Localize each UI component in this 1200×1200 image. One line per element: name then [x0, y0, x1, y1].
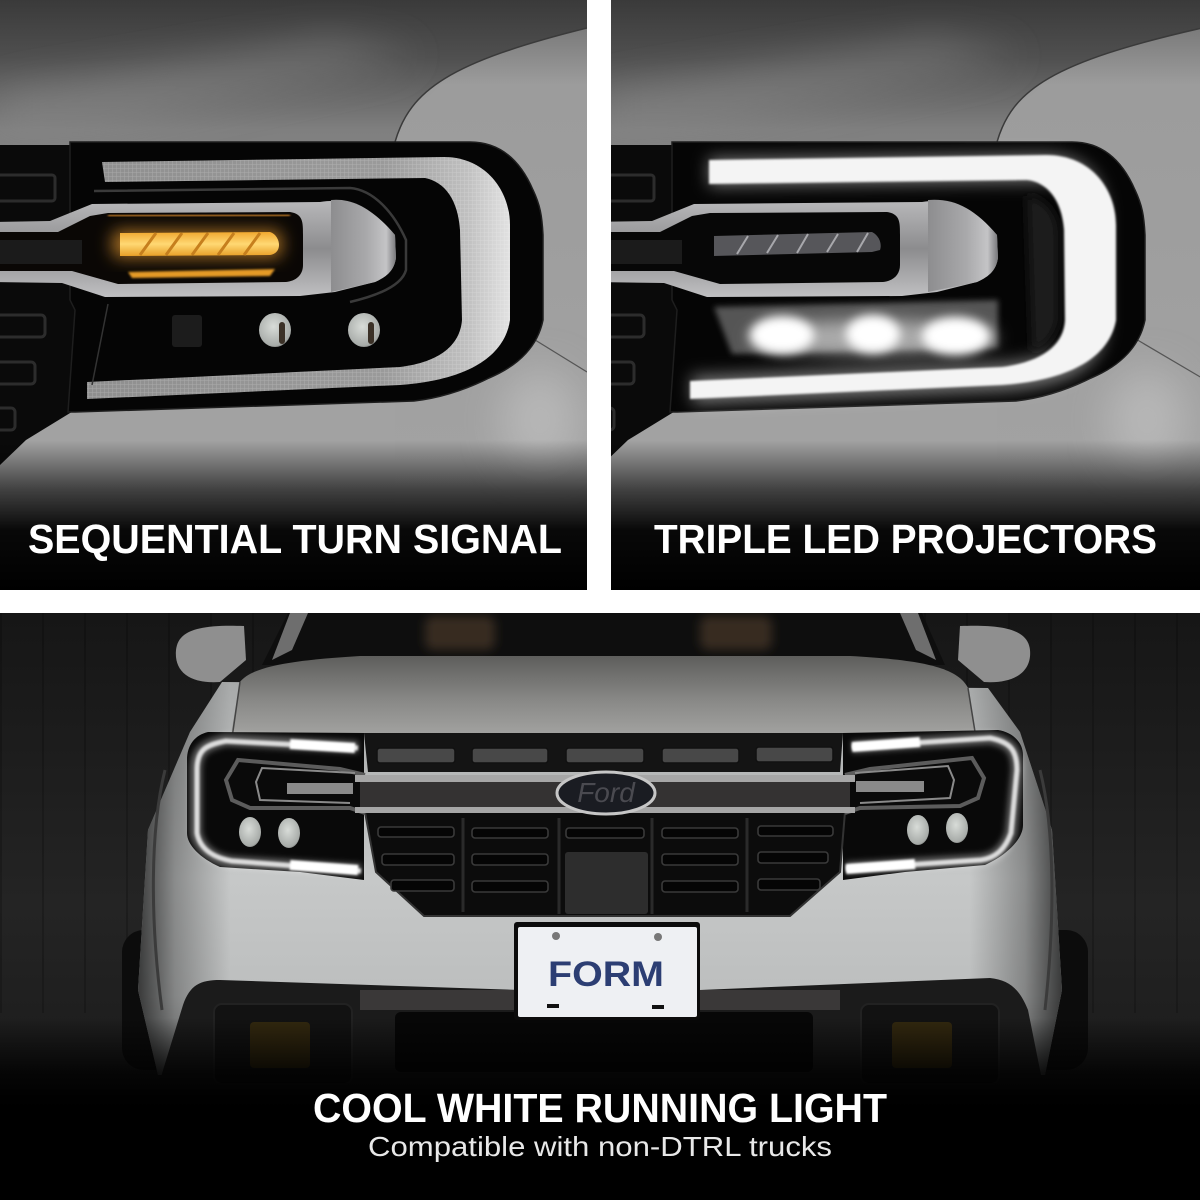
lens dark reflection right — [368, 322, 374, 344]
FORM logo on plate: FORM — [548, 955, 664, 994]
Ford oval badge — [557, 772, 655, 814]
left fog lamp — [250, 1022, 310, 1068]
right DRL glow — [846, 738, 1017, 868]
panel: sequential turn signal — [0, 0, 587, 600]
right wheel — [1020, 930, 1088, 1070]
hood streak highlight — [13, 26, 388, 116]
projector glow — [748, 320, 998, 356]
lit DRL tube — [690, 155, 1116, 399]
left DRL bright ends — [290, 744, 358, 870]
silver bezel — [592, 201, 998, 297]
right mirror — [958, 626, 1030, 682]
lower body area — [622, 402, 997, 447]
grille backing — [592, 145, 692, 465]
grey vehicle body background — [611, 0, 1200, 145]
sequential LED stripes — [140, 233, 260, 255]
right headlight housing — [843, 730, 1023, 880]
left projector lenses — [239, 817, 300, 848]
body side shading — [138, 682, 1062, 1075]
windshield pillar left — [272, 613, 308, 660]
left lamp inner ring — [256, 768, 355, 803]
central dark bar — [360, 782, 850, 807]
hood — [230, 656, 977, 740]
LED projector 1 — [750, 316, 814, 354]
hood crease right — [968, 688, 976, 738]
lower grille opening — [395, 1012, 813, 1072]
right LED bar — [856, 781, 924, 792]
panel: cool white running light, full truck front — [0, 613, 1200, 1200]
wall stripes — [0, 613, 1200, 1013]
dim projector — [172, 315, 202, 347]
projector signal opening — [592, 212, 900, 284]
left mirror — [176, 626, 246, 682]
unlit DRL band — [87, 157, 510, 399]
projector lens middle — [259, 313, 291, 347]
headlight housing — [670, 142, 1145, 412]
projector module backing — [714, 300, 998, 354]
plate screws — [552, 932, 662, 941]
headlight housing — [68, 142, 543, 412]
left DRL tube — [197, 741, 361, 871]
right fog lamp — [892, 1022, 952, 1068]
left lamp silver bezel — [226, 760, 365, 813]
hood crease line — [997, 28, 1200, 142]
projector inner line — [92, 304, 108, 385]
amber lower strip — [128, 269, 275, 278]
upper chrome bar — [355, 775, 855, 782]
projector lens right — [348, 313, 380, 347]
upper chrome trim line — [94, 188, 406, 302]
licence plate — [518, 927, 697, 1017]
black textured strip — [592, 240, 682, 264]
panel: triple LED projectors — [592, 0, 1200, 600]
lens dark reflection middle — [279, 322, 285, 344]
lower fender highlight — [500, 370, 580, 470]
grille slots — [0, 175, 55, 430]
soft reflector behind tube — [1027, 195, 1058, 352]
grille slots — [592, 175, 654, 430]
fade to black — [611, 440, 1200, 590]
right DRL tube — [846, 738, 1017, 869]
lower fender highlight — [1107, 370, 1187, 470]
grey vehicle body background — [0, 0, 587, 145]
silver bezel — [0, 201, 396, 297]
hood crease left — [232, 682, 240, 738]
upper grille pills — [377, 747, 833, 763]
subheading: compatibility: Compatible with non-DTRL trucks — [368, 1131, 832, 1162]
right fender flare line — [1040, 770, 1052, 1010]
amber signal bar — [120, 232, 279, 256]
silver block — [928, 200, 998, 292]
fade to black — [0, 1018, 1200, 1200]
front grille top section — [364, 733, 843, 772]
right fog surround — [861, 1004, 999, 1084]
left fender flare line — [153, 770, 165, 1010]
headlight assembly, lit — [611, 26, 1200, 475]
left LED bar — [287, 783, 353, 794]
right projector lenses — [907, 813, 968, 845]
silver block — [331, 200, 396, 292]
lower bumper — [160, 978, 1042, 1080]
black textured strip — [0, 240, 82, 264]
lower grille verticals — [463, 818, 747, 914]
amber glow — [112, 230, 282, 258]
label: sequential turn signal: SEQUENTIAL TURN SIGNAL — [28, 516, 562, 562]
right lamp inner ring — [855, 766, 954, 803]
left wheel — [122, 930, 192, 1070]
label: triple LED projectors: TRIPLE LED PROJECTORS — [654, 516, 1157, 562]
turn signal opening — [0, 212, 303, 284]
hood streak highlight — [615, 26, 990, 116]
LED projector 2 — [846, 315, 900, 353]
grille backing — [0, 145, 74, 465]
panel gap line — [536, 340, 587, 372]
centre sensor module — [565, 852, 648, 914]
lit DRL glow — [692, 168, 1092, 390]
fender panel — [998, 29, 1200, 395]
truck body — [138, 682, 1062, 1075]
unlit signal bar — [714, 232, 881, 256]
fender panel — [396, 28, 587, 395]
cab and windshield — [262, 613, 945, 665]
bumper centre band — [360, 990, 840, 1010]
licence plate frame — [514, 922, 700, 1020]
hood crease line — [395, 28, 587, 142]
badge script: Ford — [577, 777, 636, 808]
lower body area — [20, 402, 395, 447]
panel gap line — [1138, 340, 1200, 378]
fade to black — [0, 440, 587, 590]
left headlight housing — [187, 732, 364, 880]
signal bar facets — [737, 233, 868, 254]
left DRL glow — [196, 740, 361, 870]
right seat — [700, 616, 772, 650]
lower grille slots — [378, 826, 833, 892]
amber upper reflection — [108, 215, 290, 216]
studio wall — [0, 613, 1200, 1200]
left fog surround — [214, 1004, 352, 1084]
left seat — [425, 616, 495, 650]
right lamp silver bezel — [845, 758, 984, 813]
plate slots — [547, 1004, 664, 1009]
heading: cool white running light: COOL WHITE RUNNING LIGHT — [313, 1085, 887, 1131]
DRL lens texture — [87, 157, 510, 399]
right DRL bright ends — [846, 742, 920, 869]
windshield pillar right — [900, 613, 936, 660]
lower chrome bar — [355, 807, 855, 813]
LED projector 3 — [922, 317, 990, 355]
badge outer ring — [557, 772, 655, 814]
lower grille — [365, 812, 845, 916]
